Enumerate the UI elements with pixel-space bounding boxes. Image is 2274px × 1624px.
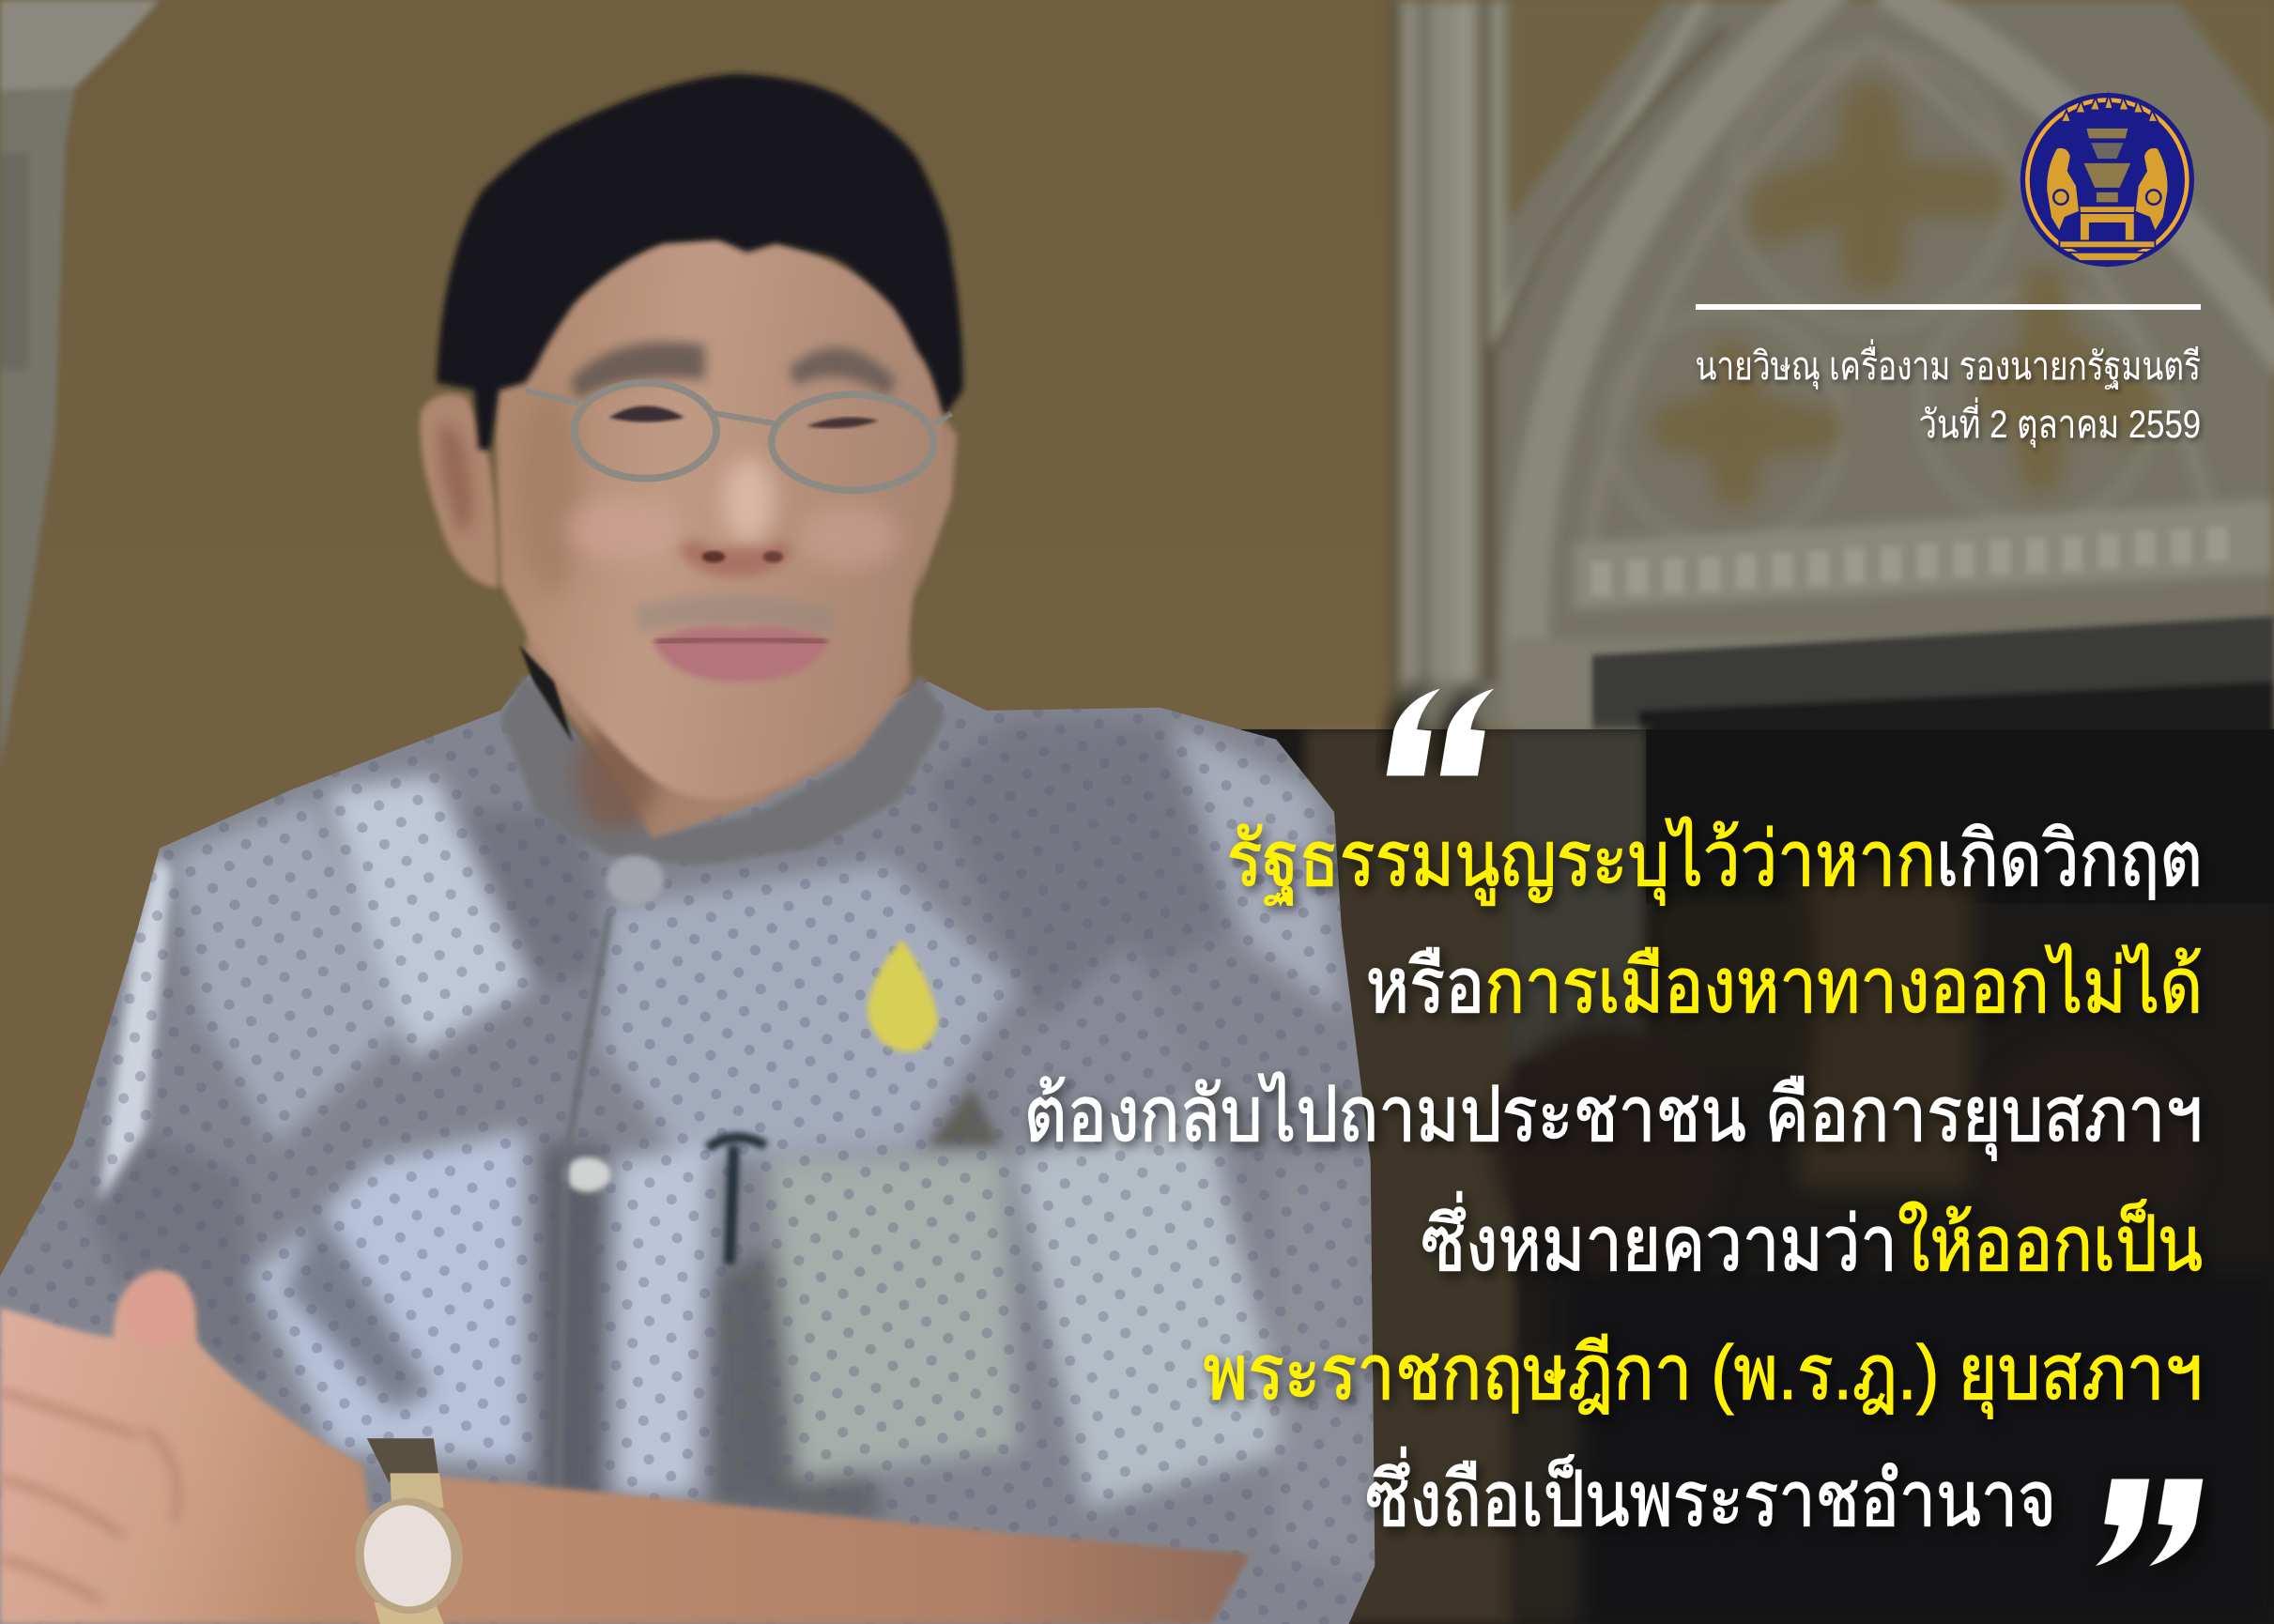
left column [0, 0, 160, 769]
date: วันที่ 2 ตุลาคม 2559 [1919, 397, 2201, 448]
placket line [559, 913, 609, 1494]
dentils [1590, 527, 2228, 596]
facial features [519, 342, 951, 682]
person: neck [525, 580, 911, 838]
pen [708, 1138, 766, 1264]
architecture [1390, 0, 2274, 740]
dentil band [1574, 500, 2274, 609]
person: shirt [0, 674, 1375, 1624]
quote line 6: ซึ่งถือเป็นพระราชอำนาจ [1365, 1447, 2056, 1542]
person: face [495, 239, 948, 800]
tracery openings [1650, 80, 2162, 510]
icon: wristwatch [349, 1438, 469, 1624]
doorway [1592, 616, 2274, 740]
rule above caption [1696, 304, 2201, 310]
caption: name and date [1695, 339, 2201, 448]
quote line 5: พระราชกฤษฎีกา (พ.ร.ฎ.) ยุบสภาฯ [1204, 1330, 2203, 1418]
flames [2061, 94, 2158, 122]
quote line 1: รัฐธรรมนูญระบุไว้ว่าหากเกิดวิกฤต [1227, 816, 2203, 905]
interior behind panel [1160, 729, 2274, 1624]
person: ears [420, 394, 957, 594]
quote line 2: หรือการเมืองหาทางออกไม่ได้ [1366, 942, 2203, 1029]
icon: yellow lapel pin [868, 940, 938, 1051]
quote line 4: ซึ่งหมายความว่าให้ออกเป็น [1421, 1191, 2203, 1287]
person: forearm and hands [0, 1271, 1250, 1624]
icon: opening quotation mark [1387, 689, 1494, 775]
icon: closing quotation mark [2096, 1479, 2203, 1566]
speaker name: นายวิษณุ เครื่องาม รองนายกรัฐมนตรี [1695, 339, 2201, 390]
person: hair [437, 74, 963, 450]
quote line 3: ต้องกลับไปถามประชาชน คือการยุบสภาฯ [1023, 1071, 2203, 1160]
buttons [607, 855, 664, 905]
quote text [1023, 816, 2203, 1542]
dark translucent panel [1160, 729, 2274, 1624]
seal of the Prime Minister's office [2020, 93, 2194, 267]
collar [500, 674, 945, 866]
